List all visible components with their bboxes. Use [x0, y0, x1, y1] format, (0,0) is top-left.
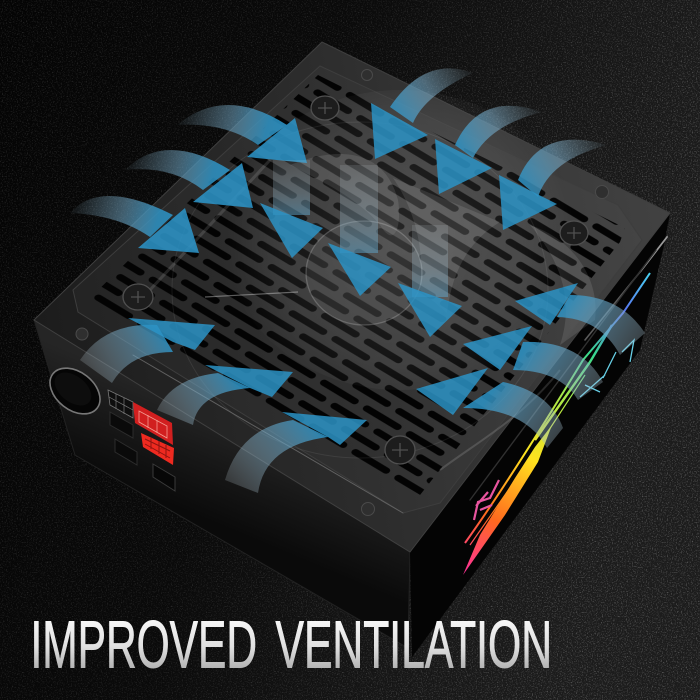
title: IMPROVED [30, 608, 257, 682]
black connector 2 [115, 439, 137, 465]
arrow: left group 3 [177, 105, 307, 163]
arrow: lower left 2 [157, 365, 293, 425]
arrow: centre down 1 [260, 160, 323, 258]
title: VENTILATION [276, 608, 552, 682]
RGB light strip [463, 273, 650, 575]
AC socket hole [41, 359, 109, 423]
left end panel [34, 320, 410, 648]
pink brand mark [474, 480, 499, 520]
arrow: left group 2 [125, 150, 253, 208]
right side panel [410, 213, 670, 657]
arrow: top right 3 [499, 140, 607, 230]
white connector [108, 390, 133, 418]
black connector 3 [153, 464, 175, 491]
arrow: centre down 2 [328, 165, 391, 296]
arrow: right 3 [416, 368, 563, 448]
airflow arrows [70, 68, 645, 493]
top face [34, 42, 670, 552]
side rim highlights [133, 237, 667, 513]
black connector 1 [110, 412, 133, 438]
red connector bottom [141, 433, 174, 465]
power supply unit [34, 42, 670, 657]
arrow: top right 2 [435, 106, 542, 194]
arrow: right 2 [463, 326, 603, 400]
modular connectors [108, 390, 175, 491]
see-through fan [150, 90, 596, 470]
red connector top [133, 402, 173, 445]
arrow: right 1 [515, 283, 645, 355]
arrow: left group 1 [70, 196, 199, 253]
raised vent panel outline [73, 66, 642, 513]
arrow: lower left 3 [225, 412, 367, 493]
large screws [123, 96, 588, 464]
arrow: top right 1 [371, 68, 473, 159]
fan hub [306, 221, 422, 325]
arrow: centre down 3 [398, 225, 462, 337]
RGB logo marks [580, 340, 634, 397]
small corner screws [76, 70, 608, 516]
ventilation slots [94, 75, 625, 495]
arrow: lower left 1 [80, 318, 215, 383]
